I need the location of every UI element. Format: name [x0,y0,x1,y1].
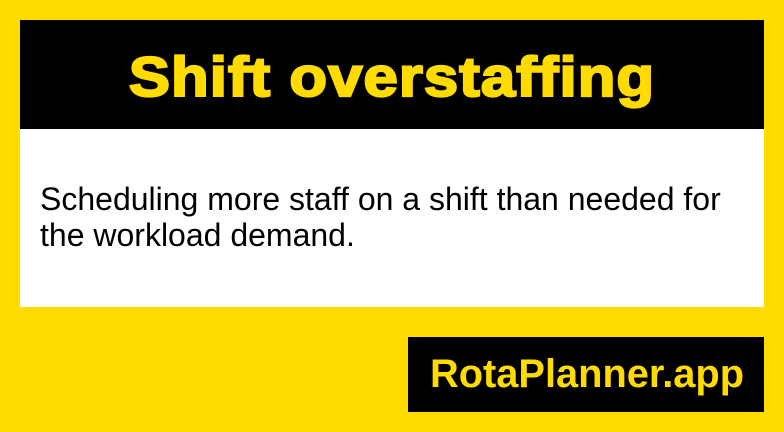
title: Shift overstaffing [129,45,655,108]
title banner [20,20,764,129]
brand badge [408,337,764,412]
definition text: Scheduling more staff on a shift than needed for the workload demand. [40,181,721,253]
panel: definition [20,129,764,307]
brand name: RotaPlanner.app [430,352,744,396]
